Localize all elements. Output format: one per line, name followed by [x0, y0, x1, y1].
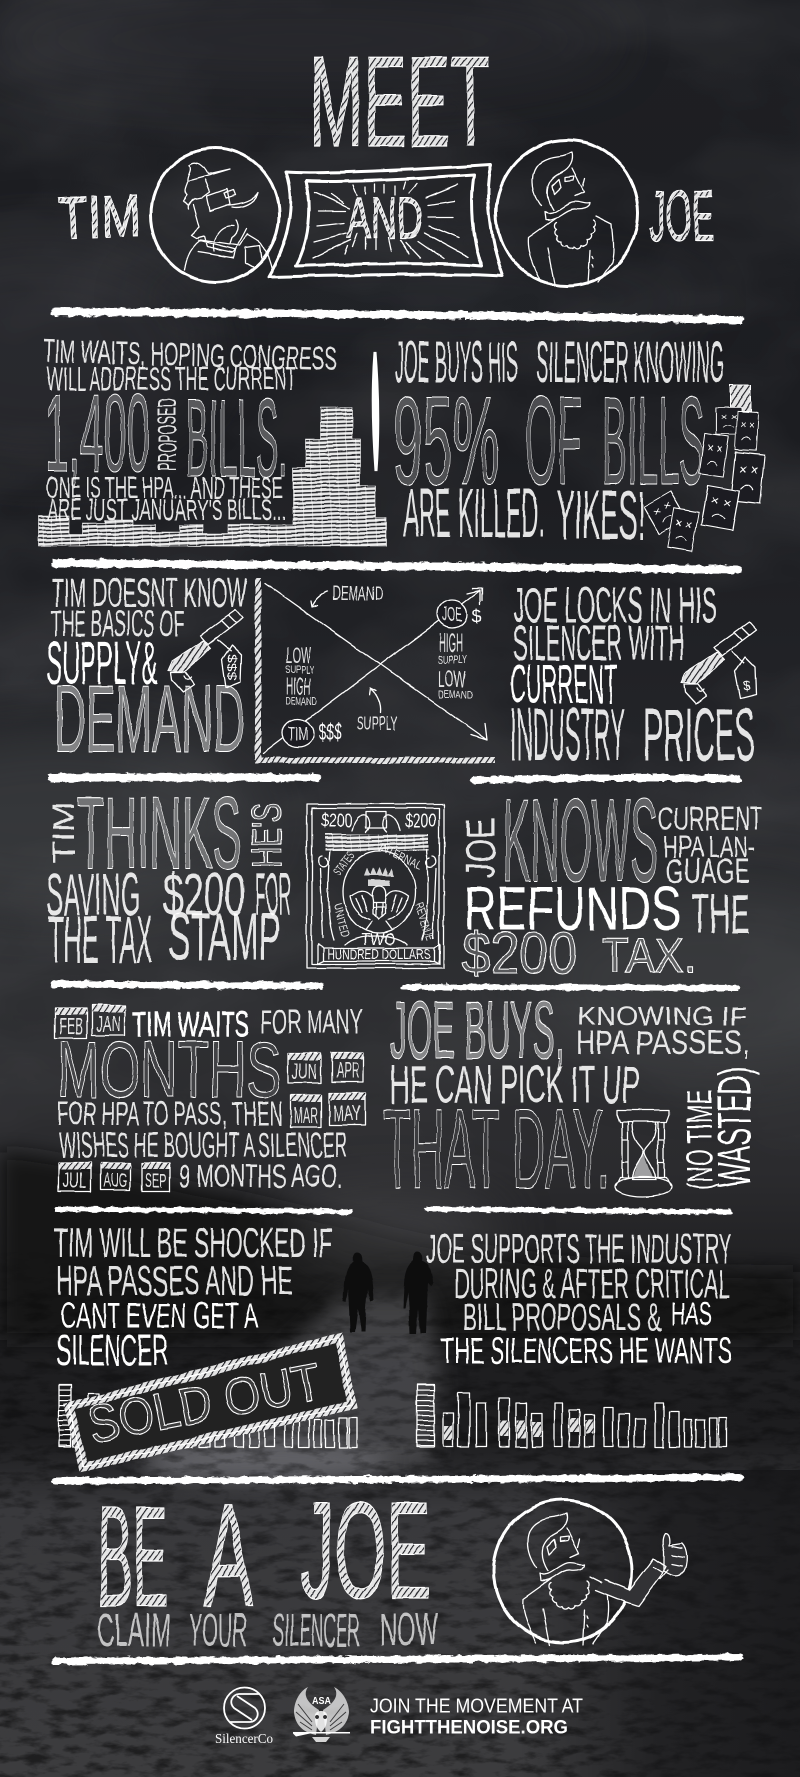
- text: DEMAND: [54, 666, 245, 773]
- text: no time vertical: (NO TIME: [679, 1090, 720, 1190]
- text: refunds: REFUNDS: [464, 875, 681, 944]
- text: he's vertical: HE'S: [243, 803, 290, 868]
- label: low supply high demand: DEMAND: [285, 696, 317, 708]
- text: wasted vertical: WASTED): [708, 1067, 760, 1187]
- panel: Tim waits on 1400 bills: BILLS.: [186, 377, 288, 500]
- calendar: Jun: [288, 1053, 321, 1084]
- banner: AND: [268, 165, 503, 277]
- text: can't even get a: CANT EVEN GET A: [60, 1295, 258, 1336]
- icons: dead bills: [644, 385, 765, 552]
- stamp seal: eagle oval: [343, 851, 415, 933]
- panel: Joe buys knowing bills die: 95%: [393, 372, 500, 511]
- label: high supply low demand: LOW: [438, 666, 465, 693]
- icons: silencer collection: [417, 1385, 727, 1447]
- text: 9 months ago: 9 MONTHS AGO.: [179, 1158, 343, 1194]
- calendar: Sep: [142, 1163, 170, 1193]
- panel: supply and demand, Tim: THE BASICS OF: [51, 603, 184, 644]
- label: low supply high demand: [285, 642, 317, 708]
- label: low supply high demand: SUPPLY: [286, 664, 314, 676]
- divider rule: [55, 1657, 740, 1661]
- subhead: claim your silencer now: NOW: [380, 1603, 438, 1655]
- panel: Joe buys knowing bills die: YIKES!: [556, 476, 645, 554]
- divider rule: [55, 312, 740, 320]
- panel: Joe buys knowing bills die: OF: [525, 372, 582, 511]
- number: $200: $200: [462, 921, 577, 986]
- banner rays: [313, 182, 468, 259]
- divider rule left: [52, 773, 317, 782]
- text: FOR: [255, 861, 291, 928]
- text: for HPA to pass, then: FOR HPA TO PASS, THEN: [57, 1095, 283, 1132]
- stamp scroll: hundred dollars: [318, 944, 440, 964]
- chart: supply and demand: [258, 577, 495, 760]
- calendar: Jul: [59, 1162, 91, 1193]
- icon: silencer pistol with price tag: [681, 622, 756, 704]
- panel: Tim thinks saving $200: SAVING: [46, 861, 140, 928]
- title: MEET: MEET: [309, 30, 490, 174]
- text: one is the HPA: ONE IS THE HPA... AND THESE: [46, 470, 283, 505]
- stamp lettering: TWO: [361, 930, 395, 949]
- name: TIM: TIM: [57, 182, 142, 252]
- footer: [215, 1687, 583, 1746]
- calendar: Apr: APR: [336, 1058, 359, 1083]
- panel: Tim waits many months: [55, 1003, 365, 1194]
- text: knowing if: KNOWING IF: [577, 1001, 747, 1031]
- panel: Tim waits on 1400 bills: 1,400: [45, 372, 150, 495]
- label: Joe high price: JOE: [442, 605, 462, 626]
- text: guage: GUAGE: [666, 852, 750, 891]
- text: Tim waits hoping Congress: TIM WAITS, HOPING CONGRESS: [43, 332, 338, 377]
- calendar: Jan: JAN: [96, 1011, 121, 1036]
- panel: Tim waits on 1400 bills: [38, 332, 386, 546]
- label: Joe high price: $: [472, 606, 482, 626]
- panel: Joe locks in current prices: [510, 577, 756, 776]
- divider rule left: [57, 1209, 350, 1212]
- chart: stacks of bills: [38, 407, 386, 546]
- divider rule: [55, 1477, 740, 1481]
- text: HPA passes: HPA PASSES,: [576, 1024, 750, 1062]
- panel: Tim thinks saving $200: THINKS: [77, 776, 242, 890]
- text: wishes he bought a silencer: WISHES HE BOUGHT A SILENCER: [59, 1126, 347, 1165]
- supply line: [263, 588, 482, 753]
- panel: Joe knows refunds: [457, 775, 763, 986]
- stamp lettering: STATES: [330, 849, 357, 878]
- label: high supply low demand: DEMAND: [438, 689, 472, 701]
- subhead: claim your silencer now: [97, 1603, 438, 1656]
- text: HPA passes and he: HPA PASSES AND HE: [56, 1257, 293, 1304]
- label: high supply low demand: SUPPLY: [438, 654, 467, 666]
- icon: silencer pistol with price tag: $$$: [225, 653, 240, 680]
- calendar: Apr: [332, 1052, 363, 1083]
- divider rule left: [54, 984, 320, 986]
- panel: Tim thinks saving $200: [46, 776, 291, 978]
- calendar: Mar: MAR: [294, 1103, 318, 1128]
- text: months: MONTHS: [57, 1025, 281, 1114]
- header: Tim and Joe portraits: [57, 140, 714, 286]
- text: JOE: [649, 177, 714, 257]
- call to action: Be a Joe: JOE: [301, 1474, 431, 1628]
- stamp: sold out: SOLD OUT: [83, 1353, 326, 1455]
- logo: ASA owl and wings: ASA: [312, 1695, 331, 1707]
- calendar: May: [329, 1093, 365, 1126]
- axes: [258, 577, 495, 760]
- icon: silencer pistol with price tag: [168, 610, 243, 692]
- stamp lettering: UNITED: [330, 902, 352, 939]
- demand line: [265, 583, 487, 740]
- panel: Joe locks in current prices: CURRENT: [510, 652, 617, 715]
- portrait: Joe thumbs up: [494, 1500, 687, 1645]
- divider rule right: [474, 778, 738, 780]
- panel: Tim waits on 1400 bills: PROPOSED: [152, 398, 182, 471]
- panel: Joe buys, picks it up that day: [383, 985, 760, 1212]
- number: $200: $200: [163, 861, 245, 928]
- text: Tim waits: TIM WAITS: [132, 1004, 250, 1045]
- icons: empty silencer shelf: [59, 1385, 357, 1447]
- text: join the movement at: JOIN THE MOVEMENT AT: [370, 1696, 583, 1718]
- portrait: Tim with camera and hat: [151, 148, 279, 282]
- stamp scroll: hundred dollars: HUNDRED DOLLARS: [328, 946, 430, 963]
- subhead: claim your silencer now: SILENCER: [273, 1604, 360, 1656]
- text: for many: FOR MANY: [260, 1003, 363, 1040]
- text: TIM DOESNT KNOW: [51, 569, 247, 616]
- divider rule: [55, 563, 738, 570]
- stamp corners: $200: $200: [321, 811, 352, 832]
- text: will address the current: WILL ADDRESS THE CURRENT: [47, 360, 296, 397]
- text: fightthenoise.org: FIGHTTHENOISE.ORG: [370, 1716, 568, 1738]
- panel: supply and demand, Tim: SUPPLY&: [46, 629, 158, 698]
- divider rule right: [404, 987, 737, 988]
- label: Tim low price: $$$: [319, 719, 342, 746]
- call to action: Be a Joe: A: [204, 1473, 253, 1638]
- logo: SilencerCo: [215, 1688, 273, 1746]
- text: HPA language: HPA LAN-: [663, 829, 755, 864]
- logo: ASA owl and wings: [293, 1687, 350, 1742]
- panel: Tim thinks saving $200: THE TAX: [48, 902, 153, 978]
- text: Tim vertical: TIM: [46, 802, 81, 863]
- label: supply: SUPPLY: [357, 714, 398, 735]
- stamp corners: $200: [321, 811, 436, 832]
- vertical divider: [373, 352, 378, 471]
- label: demand: [311, 584, 383, 607]
- call to action: Be a Joe: [97, 1473, 687, 1656]
- calendar: Jul: JUL: [63, 1168, 87, 1193]
- call to action: Be a Joe: BE: [97, 1476, 168, 1637]
- calendar: Sep: SEP: [145, 1170, 167, 1193]
- chart: supply and demand: HIGH: [439, 628, 463, 658]
- label: high supply low demand: [438, 628, 472, 701]
- silhouettes of two men walking: [343, 1252, 433, 1333]
- calendar: Mar: [291, 1095, 321, 1128]
- panel: supply and demand, Tim: [46, 569, 247, 773]
- panel: Joe buys knowing bills die: [393, 330, 765, 554]
- subhead: claim your silencer now: YOUR: [189, 1604, 247, 1656]
- chart: supply and demand: HIGH: [286, 673, 311, 701]
- panel: Tim shocked, sold out: [54, 1219, 357, 1467]
- text: has: HAS: [671, 1296, 712, 1332]
- stamp corners: $200: $200: [405, 811, 436, 832]
- panel: Joe supports the industry: [417, 1225, 732, 1447]
- icon: hourglass: [615, 1110, 671, 1197]
- label: Joe high price: [437, 600, 482, 628]
- illustration: $200 tax stamp: [307, 804, 444, 968]
- portrait: Joe with beard: [496, 140, 638, 286]
- icon: silencer pistol with price tag: $: [743, 678, 751, 693]
- label: Tim low price: [282, 719, 342, 747]
- label: demand: DEMAND: [332, 584, 383, 605]
- stamp lettering: INTERNAL: [377, 840, 425, 872]
- text: Tim will be shocked if: TIM WILL BE SHOCKED IF: [54, 1219, 332, 1266]
- text: just January's bills: ARE JUST JANUARY'S BILLS...: [47, 492, 286, 527]
- stamp lettering: [330, 840, 437, 949]
- calendar: Jun: JUN: [292, 1059, 317, 1084]
- calendar: Aug: [101, 1163, 130, 1192]
- text: Joe vertical: JOE: [457, 818, 504, 878]
- panel: Joe buys knowing bills die: JOE BUYS HIS: [395, 330, 518, 395]
- subhead: claim your silencer now: CLAIM: [97, 1604, 171, 1656]
- panel: Tim thinks saving $200: STAMP: [168, 899, 281, 975]
- label: supply: [357, 688, 398, 735]
- text: tax: TAX.: [602, 930, 696, 983]
- label: Tim low price: TIM: [288, 724, 308, 745]
- text: silencer: SILENCER: [56, 1326, 168, 1375]
- banner: AND: AND: [347, 186, 423, 251]
- label: low supply high demand: LOW: [286, 642, 311, 668]
- calendar: Feb: FEB: [59, 1014, 83, 1039]
- calendar: Aug: AUG: [104, 1170, 127, 1192]
- text: the: THE: [691, 882, 750, 945]
- divider rule right: [427, 1209, 730, 1212]
- logo: SilencerCo: SilencerCo: [215, 1731, 273, 1746]
- stamp lettering: REVENUE: [412, 902, 437, 942]
- calendar: Feb: [55, 1008, 87, 1039]
- calendar: May: MAY: [333, 1101, 361, 1126]
- calendar: Jan: [92, 1005, 125, 1036]
